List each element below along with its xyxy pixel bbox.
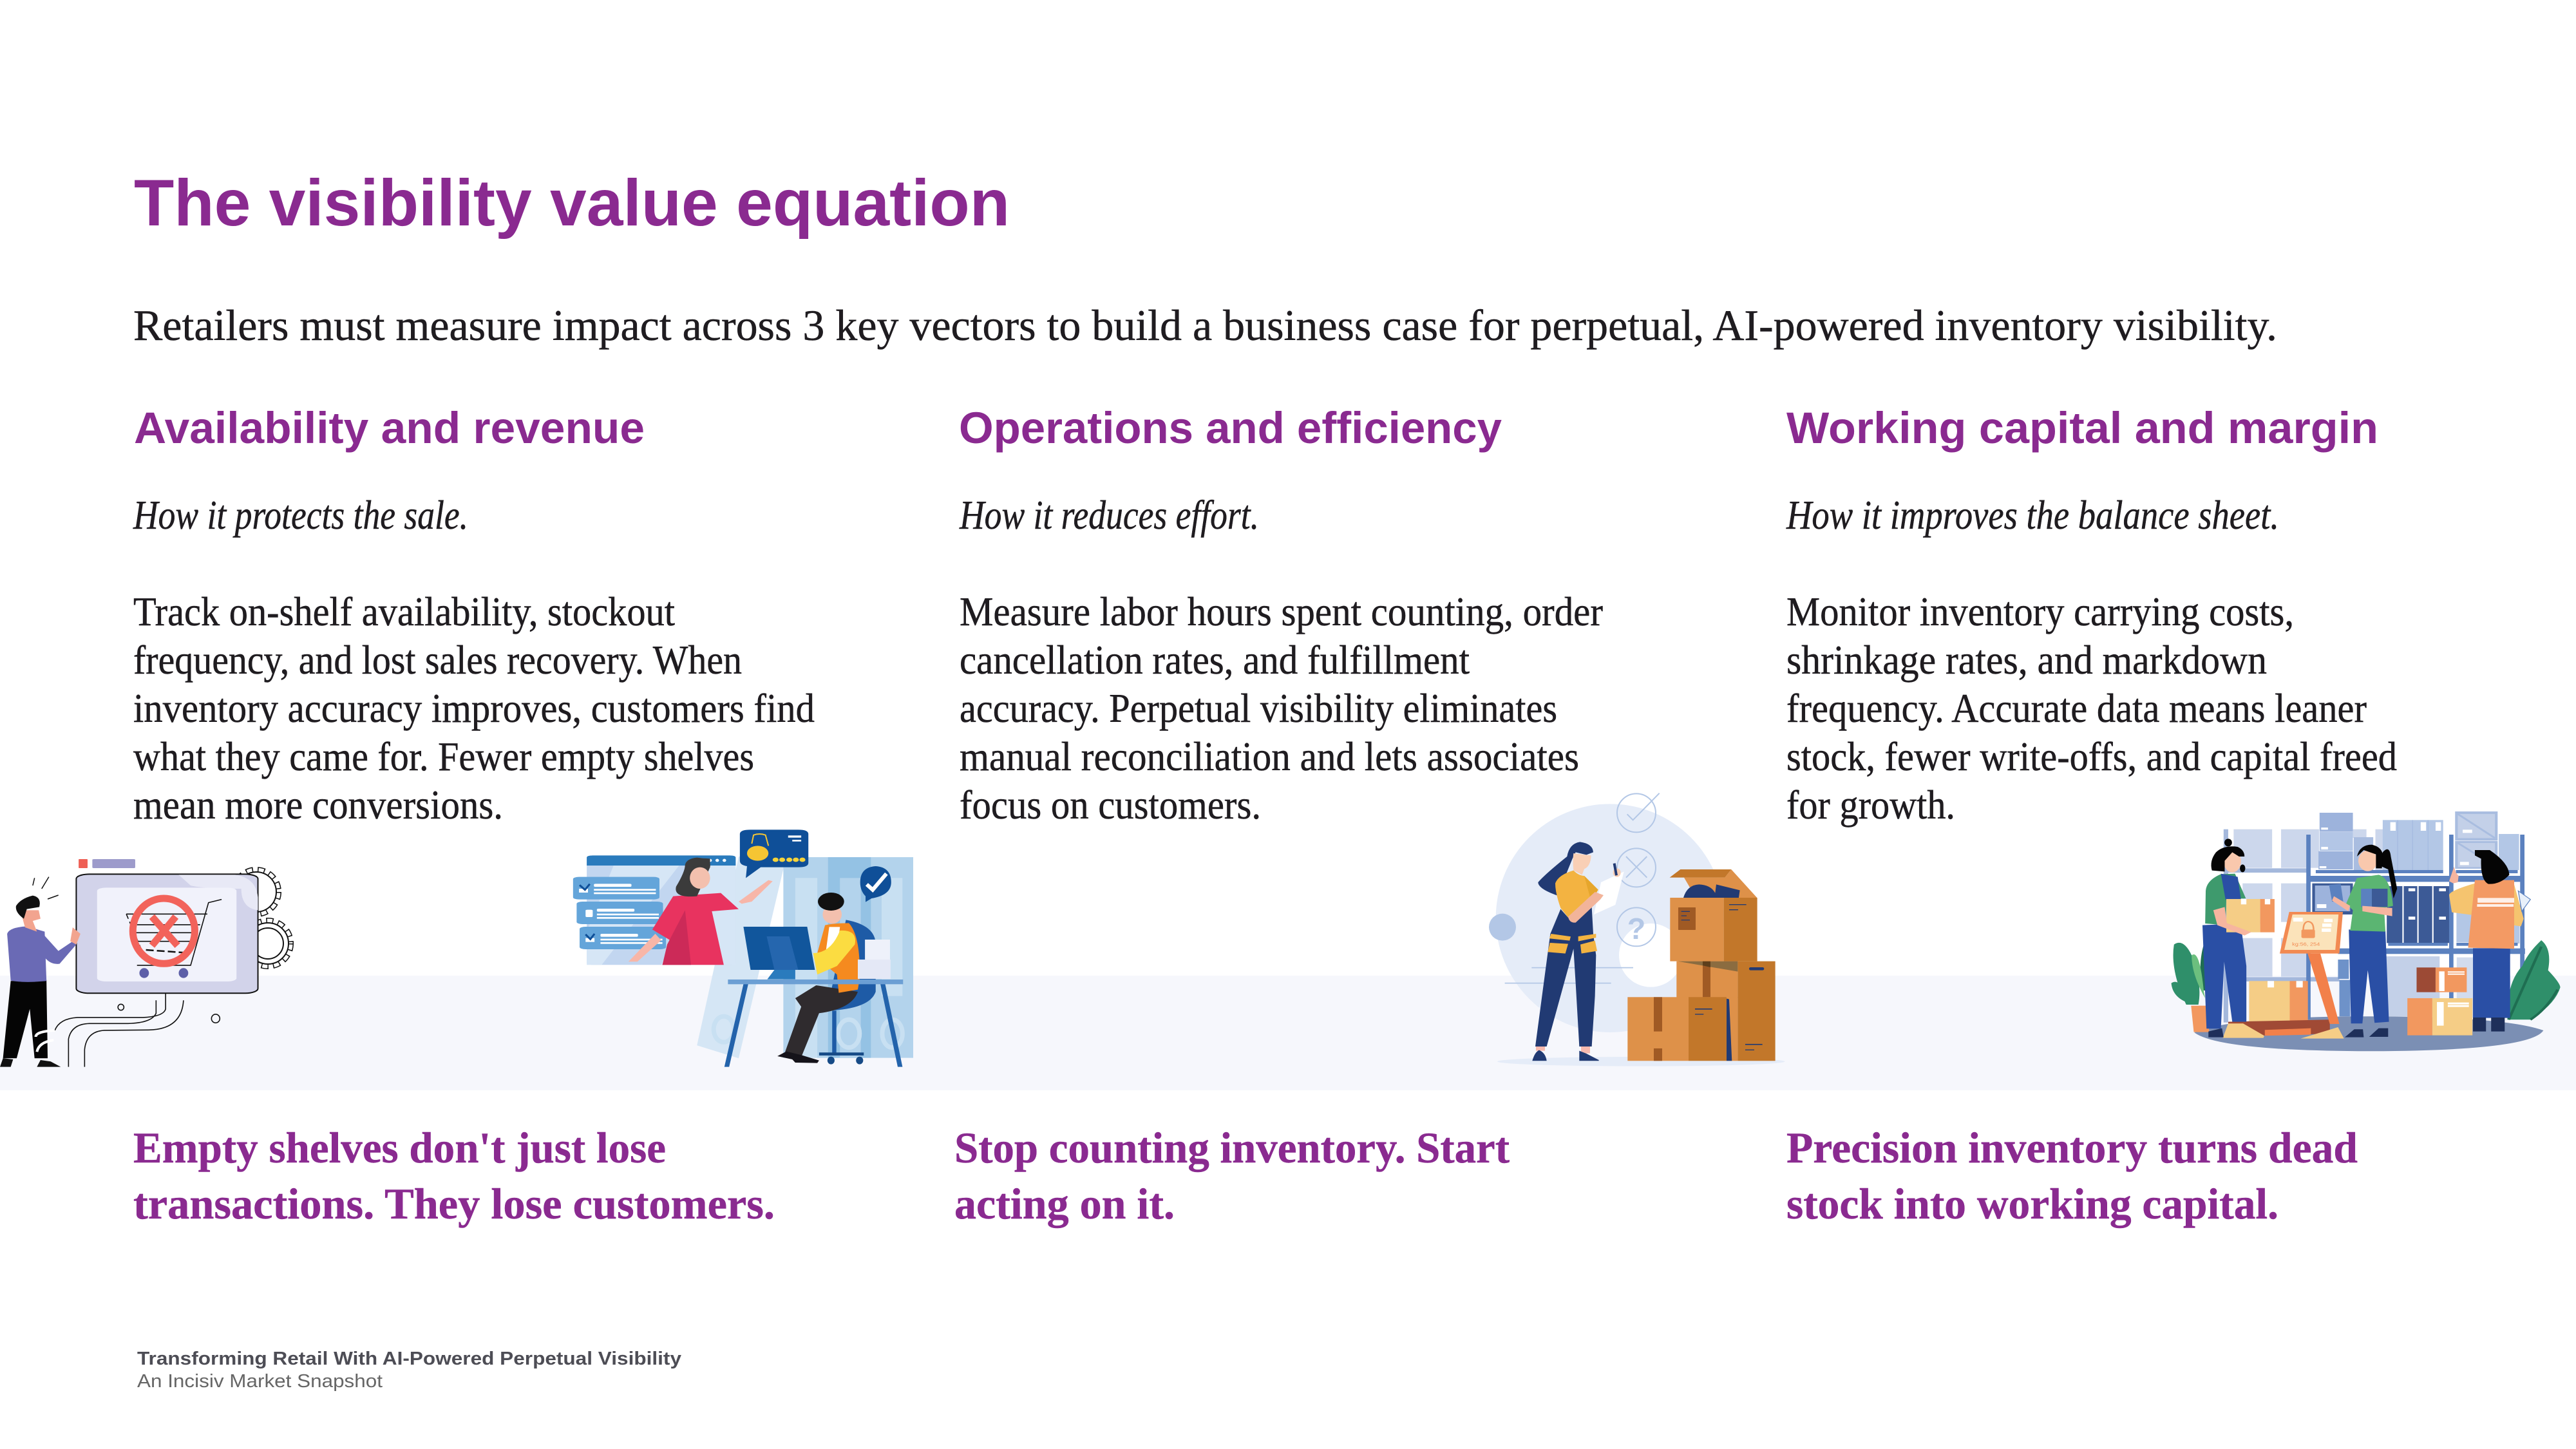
body text: operations: accuracy. Perpetual visibility eliminates: [960, 686, 1557, 731]
body text: operations: [960, 589, 1603, 828]
body text: working capital: for growth.: [1786, 782, 1955, 828]
icon: check: [1617, 793, 1660, 832]
desktop monitor: [743, 927, 815, 980]
chair: [819, 920, 876, 1065]
callout: availability: [133, 1123, 775, 1228]
tagline: reduces effort: How it reduces effort.: [959, 493, 1259, 538]
illustration: empty cart alert with confused shopper: [0, 859, 258, 1067]
speech bubble: handbag rating: [740, 829, 808, 878]
browser window with task cards: [573, 855, 735, 965]
icon: screen with crossed-out cart: [76, 874, 258, 993]
heading: working capital and margin: Working capital and margin: [1786, 403, 2378, 453]
body text: availability: inventory accuracy improves, customers find: [133, 686, 815, 731]
ground: [2194, 1016, 2543, 1051]
background panels: [697, 857, 913, 1058]
body text: availability: Track on-shelf availability, stockout: [133, 589, 675, 634]
panel: working capital and margin: [1786, 403, 2397, 828]
desk: [724, 980, 903, 1067]
floor box: [2249, 981, 2308, 1021]
kiosk with lock screen: kg:56, 254: [2292, 941, 2320, 947]
woman in pink: [629, 858, 773, 965]
wires from screen: [55, 993, 220, 1067]
plant: left: [2172, 943, 2209, 1032]
icon: question mark: ?: [1627, 912, 1645, 945]
body text: operations: cancellation rates, and fulfillment: [960, 638, 1470, 683]
icon: status bars: [79, 859, 135, 868]
footer: [137, 1349, 681, 1392]
callout: operations: acting on it.: [954, 1179, 1175, 1228]
callout: working capital: [1786, 1123, 2358, 1228]
body text: working capital: [1786, 589, 2397, 828]
man at computer: [777, 893, 891, 1063]
body text: working capital: shrinkage rates, and markdown: [1786, 638, 2267, 683]
callout: operations: Stop counting inventory. Start: [954, 1123, 1510, 1172]
panel: operations and efficiency: [959, 403, 1603, 828]
title: The visibility value equation: [134, 166, 1010, 240]
stacked cardboard boxes: [1627, 869, 1776, 1061]
callout: availability: transactions. They lose customers.: [133, 1179, 775, 1228]
icon: cross: [1617, 848, 1656, 887]
footer: An Incisiv Market Snapshot: [137, 1371, 383, 1392]
kiosk with lock screen: [2223, 912, 2344, 1039]
body text: availability: frequency, and lost sales recovery. When: [133, 638, 742, 683]
illustration: warehouse team with kiosk: [2172, 811, 2561, 1051]
tagline: improves the balance sheet: How it improves the balance sheet.: [1786, 493, 2279, 538]
body text: availability: what they came for. Fewer empty shelves: [133, 734, 754, 779]
worker holding box: [2202, 838, 2275, 1037]
body text: working capital: Monitor inventory carrying costs,: [1786, 589, 2294, 634]
storage shelves and stock: [2224, 811, 2525, 1023]
plant: right: [2507, 940, 2561, 1019]
body text: availability: [133, 589, 815, 828]
subtitle: Retailers must measure impact across 3 key vectors to build a business case for perpetual, AI-powered inventory visibility.: [133, 301, 2277, 350]
heading: availability and revenue: Availability and revenue: [134, 403, 645, 453]
icon: gears behind monitor: [234, 870, 290, 966]
stacked orange boxes: [2407, 967, 2472, 1036]
worker with clipboard: [1532, 842, 1624, 1061]
body text: working capital: frequency. Accurate data means leaner: [1786, 686, 2367, 731]
worker with tablet: [2329, 845, 2397, 1037]
tagline: protects the sale: How it protects the sale.: [133, 493, 468, 538]
footer: Transforming Retail With AI-Powered Perpetual Visibility: [137, 1349, 681, 1369]
background circle: [1489, 804, 1785, 1066]
callout: working capital: Precision inventory turns dead: [1786, 1123, 2358, 1172]
body text: working capital: stock, fewer write-offs, and capital freed: [1786, 734, 2397, 779]
illustration: associate at desk with remote colleague: [573, 829, 913, 1067]
illustration: worker checking boxes: [1489, 793, 1785, 1066]
body text: availability: mean more conversions.: [133, 782, 503, 828]
callout: working capital: stock into working capital.: [1786, 1179, 2278, 1228]
icon: question mark: [1617, 907, 1656, 946]
callout: operations: [954, 1123, 1510, 1228]
heading: operations and efficiency: Operations and efficiency: [959, 403, 1502, 453]
person: shopper: [0, 877, 80, 1067]
body text: operations: focus on customers.: [960, 782, 1261, 828]
body text: operations: Measure labor hours spent counting, order: [960, 589, 1603, 634]
panel: availability and revenue: [133, 403, 815, 828]
body text: operations: manual reconciliation and lets associates: [960, 734, 1579, 779]
worker in safety vest: [2449, 850, 2530, 1032]
callout: availability: Empty shelves don't just lose: [133, 1123, 666, 1172]
icon: check badge: [860, 866, 891, 902]
